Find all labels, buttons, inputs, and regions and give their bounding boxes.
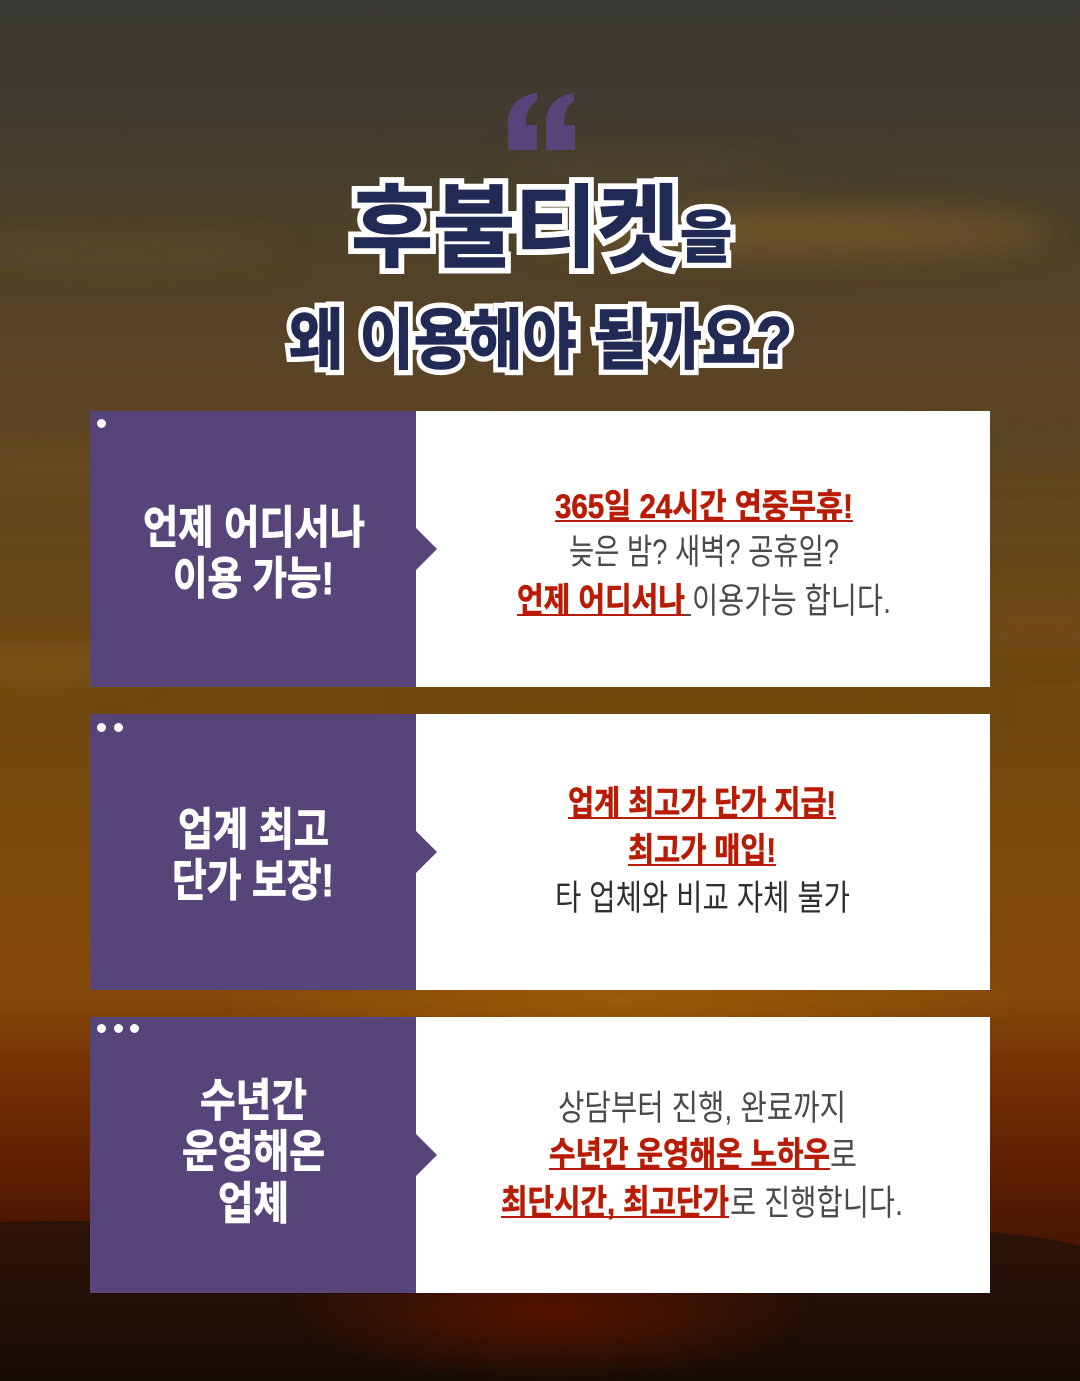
card 3 description: 최단시간, 최고단가 bbox=[501, 1184, 729, 1222]
panel: card 1 anytime bbox=[90, 411, 990, 687]
title line 2: 왜 이용해야 될까요? bbox=[289, 303, 792, 377]
card 2 description: 타 업체와 비교 자체 불가 bbox=[555, 879, 850, 918]
card 2 description: 업계 최고가 단가 지급! bbox=[568, 785, 836, 823]
card 3 purple label block bbox=[90, 1017, 437, 1293]
card 3 description bbox=[501, 1089, 903, 1223]
card 3 step dots bbox=[97, 1024, 139, 1033]
title line 1: particle: 을 bbox=[680, 206, 732, 270]
card 3 heading: 수년간 bbox=[200, 1075, 307, 1126]
card 3 description: 상담부터 진행, 완료까지 bbox=[558, 1089, 846, 1128]
card 1 description: 365일 24시간 연중무휴! bbox=[555, 488, 853, 526]
card 1 description: 언제 어디서나 bbox=[517, 582, 685, 620]
panel: card 3 experience bbox=[90, 1017, 990, 1293]
card 2 heading: 업계 최고 bbox=[178, 804, 329, 855]
card 1 heading: 언제 어디서나 bbox=[143, 502, 365, 553]
icon: opening quotation mark bbox=[508, 93, 575, 150]
card 1 description: 늦은 밤? 새벽? 공휴일? bbox=[569, 533, 839, 572]
title line 1: main word: 후불티켓 bbox=[351, 179, 679, 279]
card 3 heading: 운영해온 bbox=[182, 1126, 325, 1177]
title line 2: 왜 이용해야 될까요? bbox=[289, 303, 792, 377]
card 1 purple label block bbox=[90, 411, 437, 687]
card 2 content background bbox=[416, 714, 990, 990]
card 2 heading: 단가 보장! bbox=[172, 855, 334, 906]
card 1 description: 이용가능 합니다. bbox=[692, 582, 891, 621]
card 2 description: 최고가 매입! bbox=[628, 832, 776, 870]
card 2 heading bbox=[172, 804, 334, 906]
panel: card 2 best price bbox=[90, 714, 990, 990]
title line 1: particle: 을 bbox=[680, 206, 732, 270]
card 1 heading: 이용 가능! bbox=[173, 553, 334, 604]
card 3 content background bbox=[416, 1017, 990, 1293]
card 2 step dots bbox=[97, 723, 123, 732]
card 3 heading: 업체 bbox=[218, 1178, 289, 1229]
card 3 description: 로 bbox=[830, 1136, 857, 1175]
card 1 step dot bbox=[97, 419, 106, 428]
card 3 description: 수년간 운영해온 노하우 bbox=[549, 1136, 830, 1174]
card 3 description: 로 진행합니다. bbox=[730, 1184, 903, 1223]
title line 1: main word: 후불티켓 bbox=[351, 179, 679, 279]
card 1 content background bbox=[416, 411, 990, 687]
title bbox=[289, 179, 792, 377]
card 3 heading bbox=[182, 1075, 325, 1229]
card 2 description bbox=[555, 785, 850, 918]
card 1 description bbox=[517, 488, 891, 621]
card 1 heading bbox=[143, 502, 365, 604]
card 2 purple label block bbox=[90, 714, 437, 990]
